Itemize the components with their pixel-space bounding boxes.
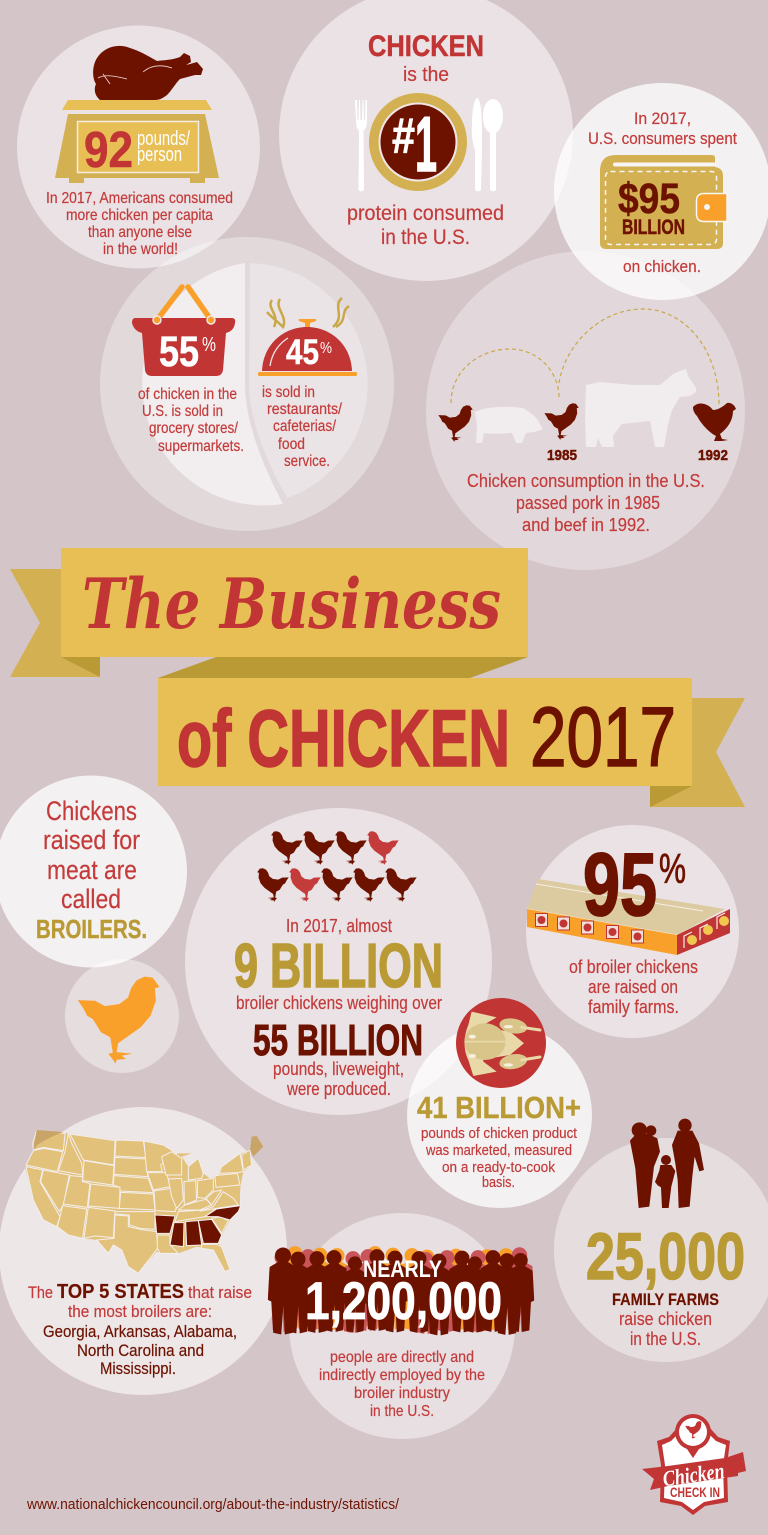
panel: top states map bbox=[0, 1107, 287, 1395]
stat: nearly 1,200,000: 1,200,000 bbox=[305, 1272, 502, 1331]
text: consumers spent: In 2017, bbox=[634, 110, 691, 128]
icon: cow bbox=[585, 369, 696, 447]
text: check in: CHECK IN bbox=[670, 1485, 720, 1500]
text: food service share: restaurants/ bbox=[267, 401, 343, 418]
text: family farms note bbox=[569, 957, 698, 1017]
stat: 92 pounds per person: 92 bbox=[84, 121, 133, 178]
icon: pig bbox=[475, 407, 543, 443]
text: raise chicken bbox=[619, 1309, 712, 1349]
icon: plate: # bbox=[392, 108, 415, 164]
text: grocery share: of chicken in the bbox=[138, 386, 237, 403]
text: top 5 states bbox=[28, 1281, 252, 1378]
text: per capita note bbox=[46, 190, 233, 258]
text: chickens raised for meat: raised for bbox=[43, 825, 140, 855]
panel: family farms count bbox=[554, 1119, 768, 1362]
icon: plate bbox=[369, 93, 467, 191]
icon: poultry house bbox=[527, 879, 730, 955]
text: top 5 states: Mississippi. bbox=[100, 1359, 176, 1378]
panel: sales split pie bbox=[100, 237, 394, 531]
panel: broilers definition bbox=[0, 776, 187, 968]
panel: production totals bbox=[185, 808, 492, 1115]
label: 1985: 1985 bbox=[547, 448, 577, 464]
panel: consumer spending bbox=[554, 83, 768, 300]
text: marketed note: on a ready-to-cook bbox=[442, 1159, 555, 1176]
text: chickens raised for meat: called bbox=[61, 884, 121, 914]
text: consumption note: and beef in 1992. bbox=[522, 515, 650, 535]
text: per capita note: In 2017, Americans consumed bbox=[46, 190, 233, 207]
stat: 92 pounds per person bbox=[84, 121, 190, 178]
text: grocery share: grocery stores/ bbox=[149, 420, 239, 437]
text: per capita note: more chicken per capita bbox=[66, 207, 213, 224]
title: the business: The Business bbox=[82, 564, 501, 645]
text: pounds liveweight: pounds, liveweight, bbox=[273, 1059, 404, 1079]
icon: knife bbox=[472, 98, 482, 192]
stat: 55 percent: % bbox=[202, 334, 216, 356]
text: top 5 states: North Carolina and bbox=[77, 1341, 204, 1360]
panel: chicken passed pork and beef bbox=[426, 251, 745, 570]
text: marketed note: basis. bbox=[482, 1174, 515, 1191]
text: food service share bbox=[262, 384, 343, 470]
text: top 5 states: The bbox=[28, 1283, 53, 1302]
stat: 95 billion dollars: $95 bbox=[618, 175, 680, 223]
text: broilers: BROILERS. bbox=[36, 914, 147, 944]
pie slice: 45 percent food service bbox=[249, 263, 368, 498]
text: employment note: people are directly and bbox=[330, 1349, 474, 1366]
text: family farms note: are raised on bbox=[588, 977, 678, 997]
logo: chicken check in bbox=[642, 1414, 746, 1515]
icon: family silhouette bbox=[630, 1119, 704, 1208]
stat: 95 percent: 95 bbox=[583, 834, 657, 934]
text: food service share: cafeterias/ bbox=[273, 418, 337, 435]
arrow: beef to 1992 bbox=[559, 309, 719, 405]
icons: flock of chickens bbox=[257, 831, 417, 902]
text: protein consumed: protein consumed bbox=[347, 202, 504, 225]
text: broiler chickens weighing over: broiler chickens weighing over bbox=[236, 993, 442, 1013]
text: protein consumed: in the U.S. bbox=[381, 226, 470, 249]
panel: family farms share bbox=[526, 825, 739, 1038]
text: consumption note: passed pork in 1985 bbox=[516, 493, 660, 513]
text: consumers spent: U.S. consumers spent bbox=[588, 130, 737, 148]
icon: chicken before pork bbox=[438, 405, 473, 442]
text: marketed note: pounds of chicken product bbox=[421, 1125, 578, 1142]
text: top 5 states: TOP 5 STATES bbox=[57, 1281, 184, 1303]
banner: of chicken 2017 bbox=[158, 678, 745, 807]
text: food service share: service. bbox=[284, 453, 330, 470]
heading: chicken: CHICKEN bbox=[368, 30, 484, 63]
text: chickens raised for meat: meat are bbox=[47, 855, 137, 885]
map: United States bbox=[25, 1130, 263, 1273]
source link: www.nationalchickencouncil.org/about-the-industry/statistics/ bbox=[26, 1497, 400, 1513]
banner: the business bbox=[10, 548, 528, 678]
stat: 9 billion: 9 BILLION bbox=[234, 932, 443, 1001]
text: consumption note bbox=[467, 471, 705, 535]
text: top 5 states: Georgia, Arkansas, Alabama, bbox=[43, 1322, 237, 1341]
text: chicken: Chicken bbox=[661, 1458, 726, 1491]
text: raise chicken: in the U.S. bbox=[630, 1329, 701, 1349]
text: consumption note: Chicken consumption in the U.S. bbox=[467, 471, 705, 491]
icon: serving cloche bbox=[258, 298, 357, 376]
stat: nearly 1,200,000: NEARLY bbox=[363, 1256, 442, 1283]
stat: 92 pounds per person: pounds/ bbox=[137, 128, 190, 150]
icon: raw chicken bbox=[456, 998, 546, 1088]
text: employment note: in the U.S. bbox=[370, 1403, 434, 1420]
stat: 95 percent: % bbox=[659, 845, 686, 892]
text: pounds liveweight: were produced. bbox=[286, 1079, 391, 1099]
icon: spoon bbox=[483, 99, 503, 192]
stat: 95 billion dollars: BILLION bbox=[622, 216, 685, 239]
text: per capita note: in the world! bbox=[103, 241, 178, 258]
title: 2017: 2017 bbox=[530, 690, 676, 784]
panel: consumption per person bbox=[17, 26, 260, 268]
label: 1992: 1992 bbox=[698, 448, 728, 464]
panel: marketed product bbox=[407, 998, 592, 1208]
text: top 5 states: the most broilers are: bbox=[68, 1302, 212, 1321]
panel: industry employment bbox=[268, 1213, 534, 1439]
text: food service share: is sold in bbox=[262, 384, 315, 401]
icon: orange chicken bbox=[78, 977, 160, 1064]
text: food service share: food bbox=[278, 436, 305, 453]
icon: wallet bbox=[600, 155, 727, 249]
stat: 55 percent: 55 bbox=[159, 328, 199, 376]
text: grocery share bbox=[138, 386, 244, 455]
panel: number one protein bbox=[279, 0, 573, 281]
stat: nearly 1,200,000 bbox=[305, 1256, 502, 1331]
text: employment note bbox=[319, 1349, 485, 1420]
text: consumers spent bbox=[588, 110, 737, 148]
text: chickens raised for meat: Chickens bbox=[46, 796, 137, 826]
text: chickens raised for meat bbox=[43, 796, 140, 914]
text: pounds liveweight bbox=[273, 1059, 404, 1099]
text: marketed note: was marketed, measured bbox=[425, 1142, 572, 1159]
pie slice: 55 percent grocery bbox=[142, 263, 283, 505]
text: marketed note bbox=[421, 1125, 578, 1191]
text: raise chicken: raise chicken bbox=[619, 1309, 712, 1329]
text: grocery share: U.S. is sold in bbox=[142, 403, 223, 420]
stat: 55 billion: 55 BILLION bbox=[253, 1016, 423, 1065]
text: is the: is the bbox=[403, 64, 449, 86]
text: employment note: broiler industry bbox=[354, 1385, 450, 1402]
icon: fork bbox=[355, 100, 367, 192]
icon: crowd of workers bbox=[268, 1246, 534, 1335]
text: top 5 states: that raise bbox=[188, 1283, 252, 1302]
icon: plate: 1 bbox=[415, 100, 437, 188]
panel: orange chicken bbox=[65, 959, 179, 1073]
icon: chicken 1992 bbox=[693, 403, 736, 441]
map: top five states highlighted bbox=[155, 1206, 241, 1247]
text: protein consumed bbox=[347, 202, 504, 249]
icon: roast turkey bbox=[93, 46, 203, 100]
icon: scale bbox=[55, 100, 219, 183]
stat: 45 percent: % bbox=[320, 340, 332, 357]
text: employment note: indirectly employed by the bbox=[319, 1367, 485, 1384]
text: family farms note: family farms. bbox=[588, 997, 679, 1017]
text: grocery share: supermarkets. bbox=[158, 438, 244, 455]
text: on chicken: on chicken. bbox=[623, 257, 701, 276]
text: in 2017 almost: In 2017, almost bbox=[286, 916, 392, 936]
icon: chicken 1985 bbox=[544, 403, 579, 440]
stat: 92 pounds per person: person bbox=[137, 144, 182, 166]
title: of chicken: of CHICKEN bbox=[177, 694, 510, 784]
text: per capita note: than anyone else bbox=[88, 224, 192, 241]
icon: basket bbox=[132, 287, 235, 376]
text: family farms note: of broiler chickens bbox=[569, 957, 698, 977]
text: family farms: FAMILY FARMS bbox=[612, 1290, 719, 1309]
stat: 45 percent: 45 bbox=[286, 333, 319, 372]
stat: 41 billion plus: 41 BILLION+ bbox=[417, 1090, 581, 1125]
arrow: pork to 1985 bbox=[451, 349, 559, 403]
